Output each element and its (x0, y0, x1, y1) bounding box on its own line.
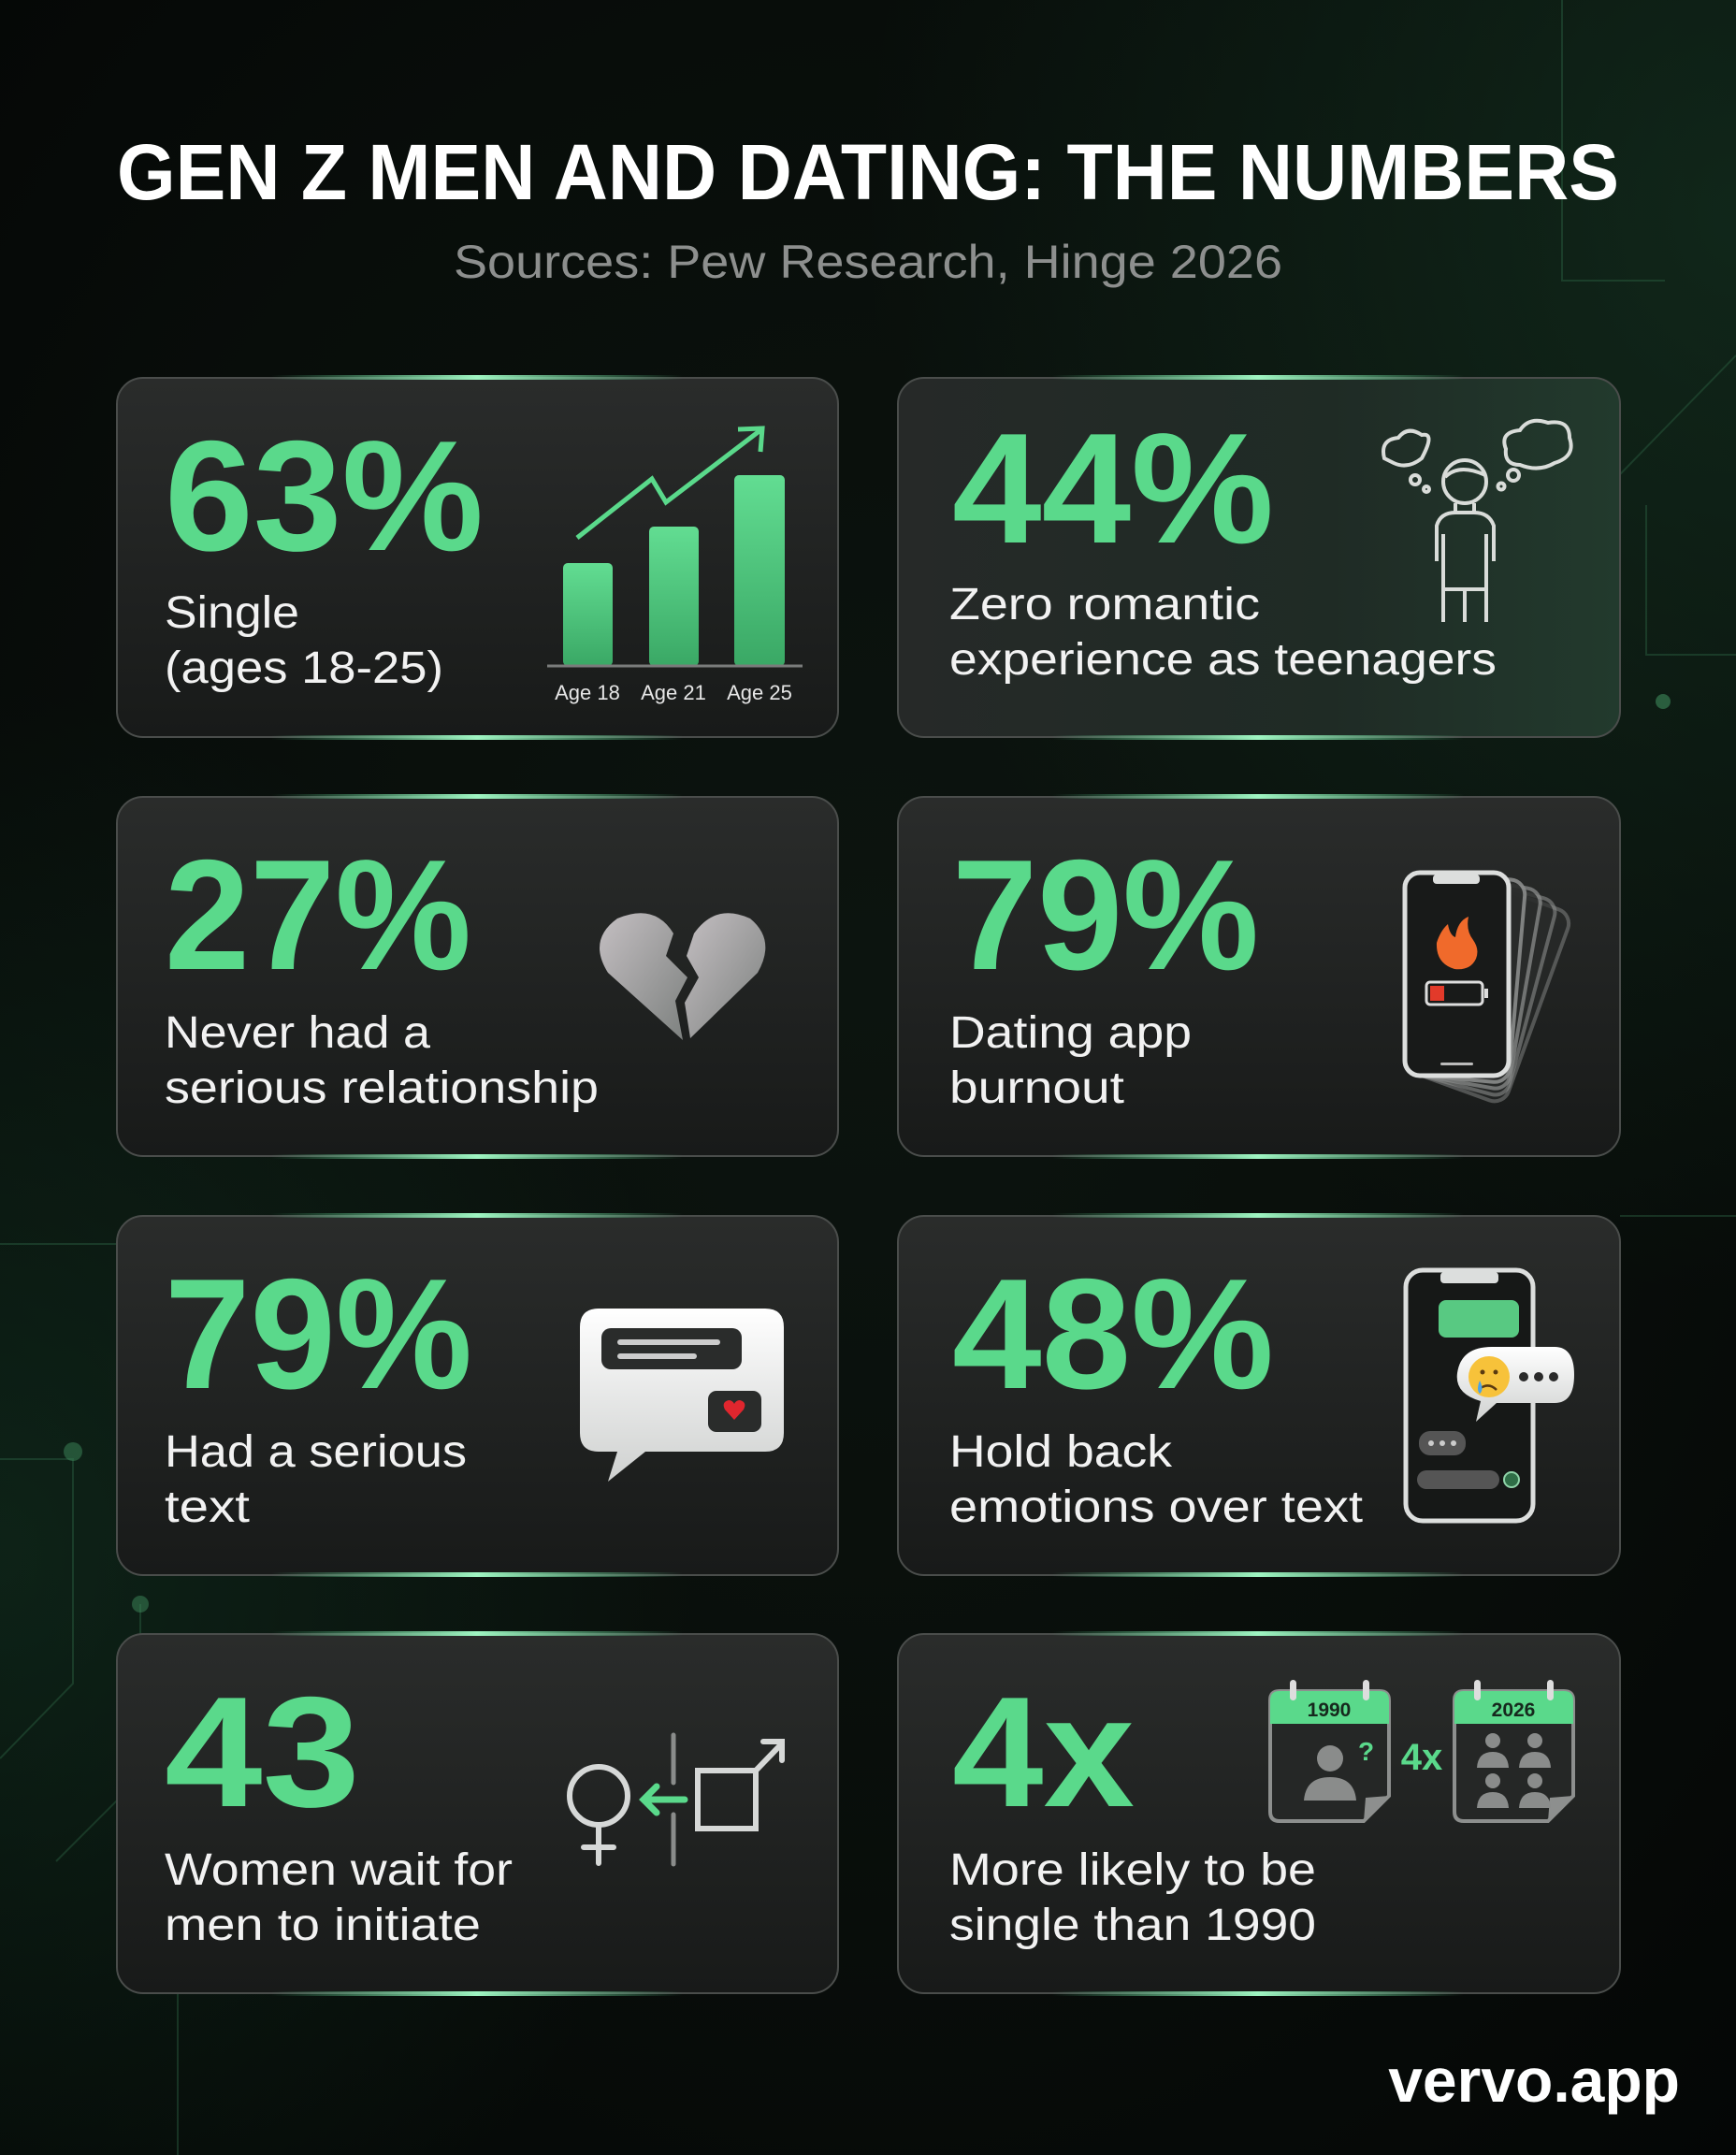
label: Hold back (949, 1427, 1173, 1477)
panel: 27% never had serious relationship (117, 794, 838, 1159)
title: GEN Z MEN AND DATING: THE NUMBERS (117, 128, 1619, 216)
label: text (165, 1482, 250, 1532)
label: Women wait for (165, 1845, 513, 1895)
bar chart: Age 18 (555, 681, 620, 704)
label: experience as teenagers (949, 635, 1497, 685)
subtitle: sources: Sources: Pew Research, Hinge 2026 (454, 236, 1282, 288)
panel: 4x more likely single (898, 1631, 1620, 1996)
icon: calendars 1990 vs 2026 (1270, 1680, 1573, 1821)
label: men to initiate (165, 1901, 481, 1950)
icon: phone stack with flame and low battery (1405, 872, 1573, 1106)
label: burnout (949, 1063, 1124, 1113)
icon: calendars 1990 vs 2026: ? (1358, 1737, 1374, 1766)
icon: calendars 1990 vs 2026: 1990 (1308, 1699, 1351, 1721)
stat number: 48% (952, 1246, 1274, 1422)
label: Never had a (165, 1008, 430, 1058)
icon: person with thought bubbles (1383, 421, 1571, 622)
stat number: 79% (952, 827, 1259, 1003)
label: serious relationship (165, 1063, 599, 1113)
panel: 63% single (117, 375, 838, 740)
icon: broken heart (600, 913, 765, 1040)
label: (ages 18-25) (165, 644, 443, 693)
label: emotions over text (949, 1482, 1363, 1532)
panel: 44% zero romantic experience (898, 375, 1620, 740)
icon: phone with crying emoji bubble (1406, 1270, 1574, 1521)
panel: 48% hold back emotions (898, 1213, 1620, 1577)
label: Single (165, 588, 299, 638)
stat number: 44% (952, 400, 1274, 576)
stat number: 63% (165, 408, 484, 584)
bar chart (547, 428, 803, 704)
icon: chat bubble with heart (580, 1309, 784, 1482)
bar chart: Age 25 (727, 681, 792, 704)
bar chart: Age 21 (641, 681, 706, 704)
stat number: 43 (165, 1664, 360, 1840)
footer: brand: vervo.app (1388, 2046, 1680, 2115)
label: More likely to be (949, 1845, 1316, 1895)
panel: 79% dating app burnout (898, 794, 1620, 1159)
label: Dating app (949, 1008, 1192, 1058)
stat number: 27% (165, 827, 471, 1003)
panel: 43 women wait (117, 1631, 838, 1996)
label: Had a serious (165, 1427, 467, 1477)
label: Zero romantic (949, 580, 1260, 629)
stat number: 79% (165, 1246, 472, 1422)
stat number: 4x (952, 1664, 1135, 1840)
panel: 79% had a serious text (117, 1213, 838, 1577)
label: single than 1990 (949, 1901, 1316, 1950)
icon: calendars 1990 vs 2026: 4x (1401, 1737, 1442, 1778)
icon: female and male symbols with arrow (570, 1735, 782, 1864)
icon: calendars 1990 vs 2026: 2026 (1492, 1699, 1535, 1721)
